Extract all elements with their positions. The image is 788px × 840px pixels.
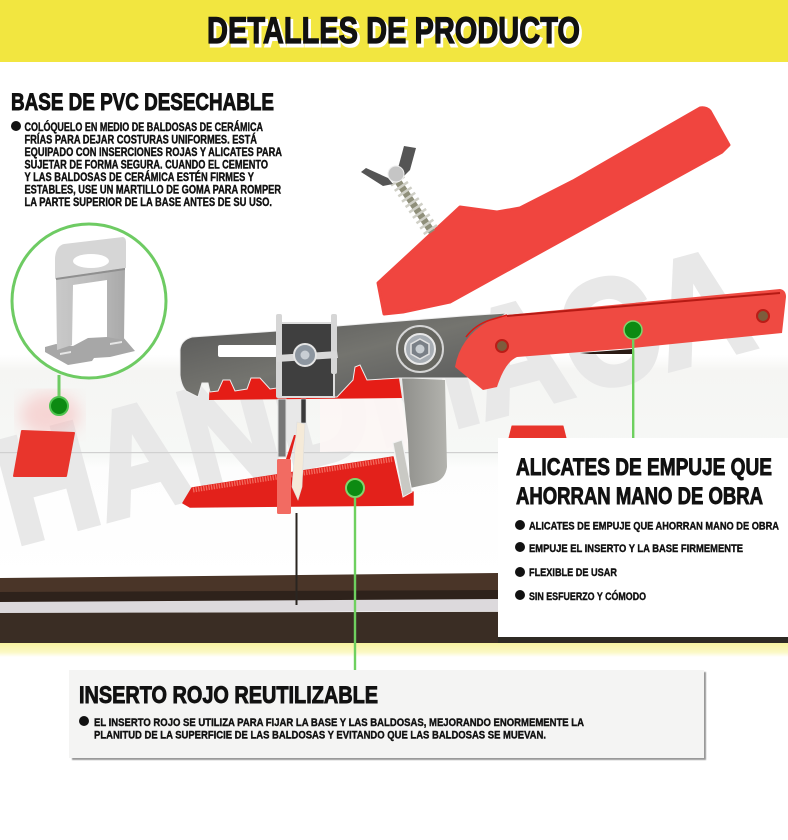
- tile gap: [296, 513, 298, 605]
- pointer: PVC base: [50, 375, 68, 415]
- icon: metal base clip: [45, 237, 135, 365]
- upper red handle: [378, 108, 729, 314]
- stems and pink pillar: [277, 399, 306, 514]
- list item 4: SIN ESFUERZO Y CÓMODO: [529, 590, 646, 603]
- shadow under handle: [580, 349, 633, 354]
- pointer: red insert: [346, 479, 364, 670]
- lower metal arm: [402, 378, 447, 488]
- icon: red base block left: [14, 393, 80, 476]
- wing screw: [361, 146, 432, 232]
- list item 3: FLEXIBLE DE USAR: [529, 567, 617, 579]
- body text: [24, 121, 282, 209]
- bullet: [79, 716, 89, 726]
- panel: base de PVC desechable: [11, 89, 282, 209]
- red wedge insert: [183, 457, 413, 507]
- body text: COLÓQUELO EN MEDIO DE BALDOSAS DE CERÁMICA: [24, 121, 263, 134]
- bullet: [11, 121, 21, 131]
- lower red handle: [455, 289, 786, 390]
- red base behind teeth: [209, 355, 402, 400]
- pliers: [180, 108, 786, 605]
- panel: inserto rojo reutilizable: [69, 670, 706, 760]
- pointer: pliers: [624, 321, 642, 438]
- body text: SUJETAR DE FORMA SEGURA. CUANDO EL CEMENTO: [24, 160, 268, 172]
- body text: [94, 717, 584, 742]
- heading: inserto rojo: INSERTO ROJO REUTILIZABLE: [79, 682, 378, 709]
- panel: alicates de empuje: [498, 438, 788, 637]
- clamp with wing nut: [276, 314, 338, 398]
- body text: Y LAS BALDOSAS DE CERÁMICA ESTÉN FIRMES Y: [24, 171, 254, 184]
- body text: LA PARTE SUPERIOR DE LA BASE ANTES DE SU USO.: [24, 197, 272, 209]
- header band: [0, 0, 788, 62]
- body text: EQUIPADO CON INSERCIONES ROJAS Y ALICATES PARA: [24, 147, 282, 159]
- callout circle: PVC base clip: [12, 224, 166, 378]
- body text: FRÍAS PARA DEJAR COSTURAS UNIFORMES. ESTÁ: [24, 134, 257, 146]
- title: DETALLES DE PRODUCTO: [207, 10, 580, 51]
- list item 2: EMPUJE EL INSERTO Y LA BASE FIRMEMENTE: [529, 543, 743, 555]
- body text: EL INSERTO ROJO SE UTILIZA PARA FIJAR LA BASE Y LAS BALDOSAS, MEJORANDO ENORMEMENTE LA: [94, 717, 584, 729]
- metal jaw: [180, 313, 507, 397]
- central nut: [397, 326, 443, 372]
- body text: PLANITUD DE LA SUPERFICIE DE LAS BALDOSAS Y EVITANDO QUE LAS BALDOSAS SE MUEVAN.: [94, 730, 546, 742]
- red block behind right: [509, 426, 566, 438]
- list item 4: [515, 590, 646, 603]
- title: DETALLES DE PRODUCTO: [209, 13, 582, 54]
- heading: alicates: [516, 454, 772, 510]
- body text: ESTABLES, USE UN MARTILLO DE GOMA PARA ROMPER: [24, 184, 282, 196]
- heading: base de PVC: BASE DE PVC DESECHABLE: [11, 89, 274, 116]
